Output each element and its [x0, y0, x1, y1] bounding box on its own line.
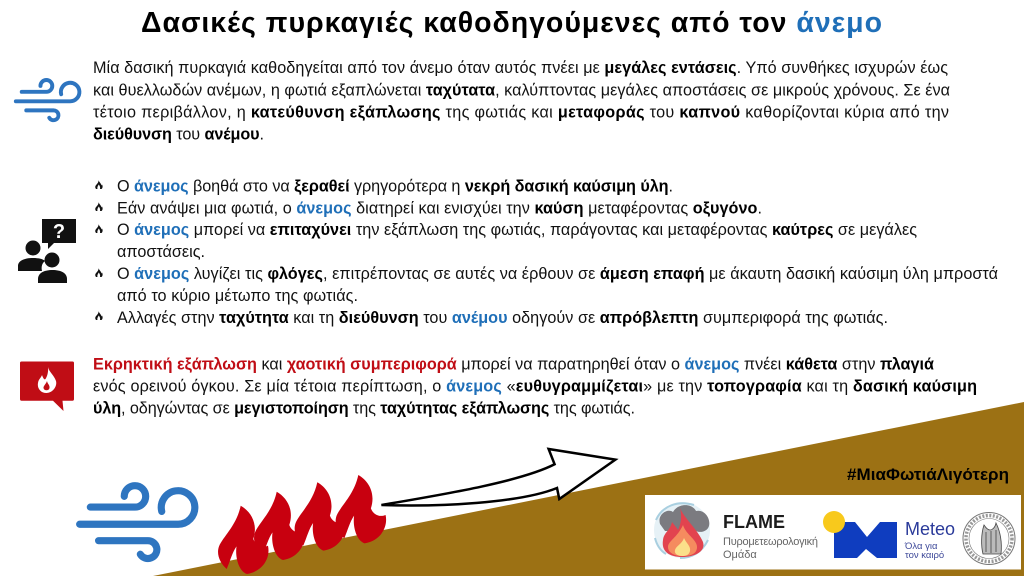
- arrow: fire spread direction: [381, 449, 615, 505]
- logo: FLAME: Πυρομετεωρολογική: [723, 536, 818, 548]
- logo: FLAME: [654, 502, 818, 561]
- title: Δασικές πυρκαγιές καθοδηγούμενες από τον άνεμο: [141, 7, 882, 39]
- text block: intro paragraph: τέτοιο περιβάλλον, η κατεύθυνση εξάπλωσης της φωτιάς και μεταφοράς του καπνού καθορίζονται κύρια από την: [93, 104, 949, 122]
- bullet list: wind effects: Ο άνεμος λυγίζει τις φλόγες, επιτρέποντας σε αυτές να έρθουν σε άμεση επαφή με άκαυτη δασική καύσιμη ύλη μπροστά: [117, 265, 998, 283]
- text block: explosive spread: [93, 356, 977, 418]
- bullet list: wind effects: Εάν ανάψει μια φωτιά, ο άνεμος διατηρεί και ενισχύει την καύση μεταφέροντας οξυγόνο.: [117, 200, 762, 218]
- text block: explosive spread: ενός ορεινού όγκου. Σε μία τέτοια περίπτωση, ο άνεμος «ευθυγραμμίζεται» με την τοπογραφία και τη δασική καύσιμη: [93, 378, 977, 396]
- bullet list: wind effects: [95, 178, 998, 327]
- hashtag: #ΜιαΦωτιάΛιγότερη: [847, 465, 1009, 484]
- logo: university seal: [963, 512, 1015, 564]
- logo: Meteo: τον καιρό: [905, 550, 944, 561]
- bullet list: wind effects: Ο άνεμος μπορεί να επιταχύνει την εξάπλωση της φωτιάς, παράγοντας και μεταφέροντας καύτρες σε μεγάλες: [117, 221, 917, 239]
- bullet list: wind effects: Αλλαγές στην ταχύτητα και τη διεύθυνση του ανέμου οδηγούν σε απρόβλεπτη συμπεριφορά της φωτιάς.: [117, 309, 888, 327]
- bullet icons: [95, 180, 103, 320]
- text block: explosive spread: Εκρηκτική εξάπλωση και χαοτική συμπεριφορά μπορεί να παρατηρηθεί όταν ο άνεμος πνέει κάθετα στην πλαγιά: [93, 356, 934, 374]
- icon: wind (large): [80, 486, 195, 559]
- text block: explosive spread: ύλη, οδηγώντας σε μεγιστοποίηση της ταχύτητας εξάπλωσης της φωτιάς.: [93, 400, 635, 418]
- logo: FLAME: FLAME: [723, 512, 785, 532]
- logo: Meteo: [823, 511, 955, 561]
- bullet list: wind effects: Ο άνεμος βοηθά στο να ξεραθεί γρηγορότερα η νεκρή δασική καύσιμη ύλη.: [117, 178, 673, 196]
- icon: red speech bubble with flame: [20, 362, 74, 411]
- icon: people with question: ?: [53, 221, 65, 243]
- panel: logos: [645, 495, 1021, 570]
- icon: people with question: [18, 219, 76, 283]
- logo: Meteo: Meteo: [905, 519, 955, 539]
- icon: red flames: [218, 475, 386, 574]
- bullet list: wind effects: από το κύριο μέτωπο της φωτιάς.: [117, 287, 358, 305]
- text block: intro paragraph: διεύθυνση του ανέμου.: [93, 126, 264, 144]
- background ground slope: [153, 402, 1024, 576]
- text block: intro paragraph: και θυελλωδών ανέμων, η φωτιά εξαπλώνεται ταχύτατα, καλύπτοντας μεγάλες αποστάσεις σε μικρούς χρόνους. Σε ένα: [93, 82, 950, 100]
- logo: FLAME: Ομάδα: [723, 549, 757, 561]
- logo: Meteo: Όλα για: [904, 541, 938, 552]
- text block: intro paragraph: [93, 59, 950, 144]
- icon: wind (intro): [16, 80, 79, 120]
- bullet list: wind effects: αποστάσεις.: [117, 243, 205, 261]
- text block: intro paragraph: Μία δασική πυρκαγιά καθοδηγείται από τον άνεμο όταν αυτός πνέει με μεγάλες εντάσεις. Υπό συνθήκες ισχυρών έως: [93, 59, 948, 77]
